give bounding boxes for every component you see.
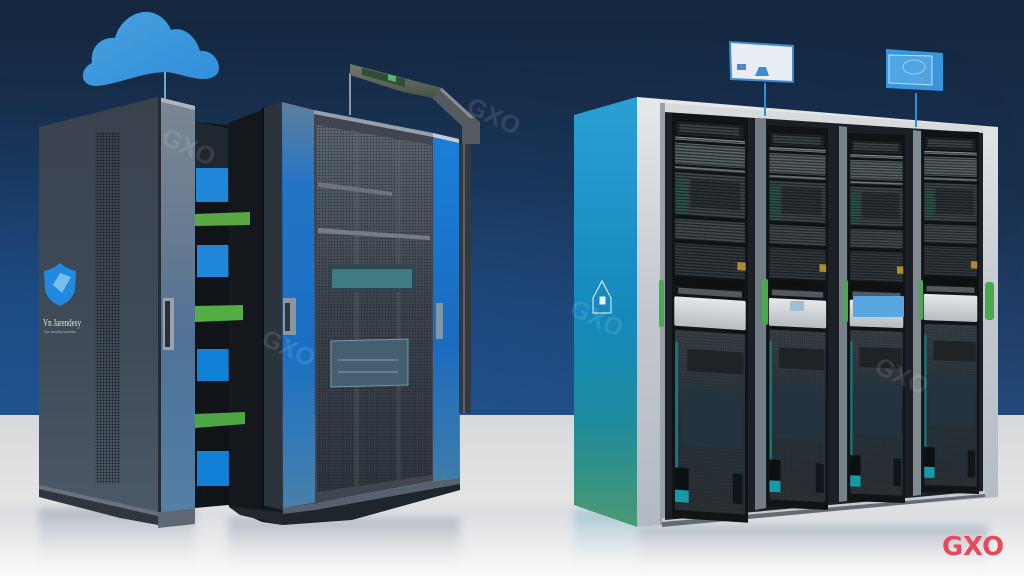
watermark: GXO — [565, 294, 628, 343]
floor — [0, 415, 1024, 576]
cabinet label: Vpn security solutions — [44, 329, 76, 334]
door — [158, 97, 195, 512]
icon: cloud — [83, 12, 219, 99]
screen — [197, 349, 229, 381]
display panel: upper — [329, 264, 416, 292]
screen — [196, 168, 229, 202]
green clips — [659, 279, 994, 327]
front frame — [637, 97, 998, 527]
rack 4 — [922, 130, 979, 494]
blue door — [282, 102, 315, 508]
open interior — [195, 110, 262, 518]
status badge — [790, 301, 804, 311]
screen — [197, 451, 229, 486]
blue strip door — [433, 135, 460, 481]
plinth — [283, 478, 460, 525]
rack 2 — [767, 125, 828, 510]
main body — [314, 110, 433, 503]
screen — [197, 245, 229, 277]
side panel — [574, 97, 637, 527]
background wall — [0, 68, 1024, 415]
vent columns — [95, 132, 120, 484]
reflection: left cabinets — [39, 508, 460, 576]
door handle — [283, 298, 296, 335]
logo: GXO — [942, 532, 1004, 562]
watermark — [157, 92, 933, 401]
watermark: GXO — [870, 352, 933, 401]
rack bay backing — [665, 112, 983, 520]
cabinet label — [43, 318, 81, 334]
mesh panel — [316, 125, 432, 492]
pillar — [913, 130, 921, 496]
reflection: right cabinet — [574, 510, 988, 576]
watermark: GXO — [462, 92, 525, 141]
rack 1 — [672, 113, 748, 523]
circuit card — [195, 212, 250, 226]
cabinet: middle server — [195, 102, 460, 525]
door handle — [163, 298, 174, 350]
icon: shield — [44, 263, 76, 306]
circuit card — [195, 305, 243, 322]
cabinet label: Vn Jarendesy — [43, 318, 81, 329]
rack 3 — [848, 133, 905, 503]
cabinet: right server — [574, 97, 998, 527]
watermark: GXO — [257, 324, 320, 373]
icon: house — [593, 281, 611, 313]
door handle — [436, 303, 443, 339]
status screen — [853, 296, 904, 317]
cabinet: left server — [39, 97, 195, 528]
sign: blue screen — [886, 49, 943, 127]
cable arm with card — [349, 64, 480, 413]
display panel: lower — [331, 339, 408, 387]
watermark: GXO — [157, 123, 220, 172]
sign: dashboard — [729, 41, 794, 116]
pillar — [755, 118, 766, 510]
circuit card — [195, 412, 245, 428]
pillar — [839, 126, 847, 502]
